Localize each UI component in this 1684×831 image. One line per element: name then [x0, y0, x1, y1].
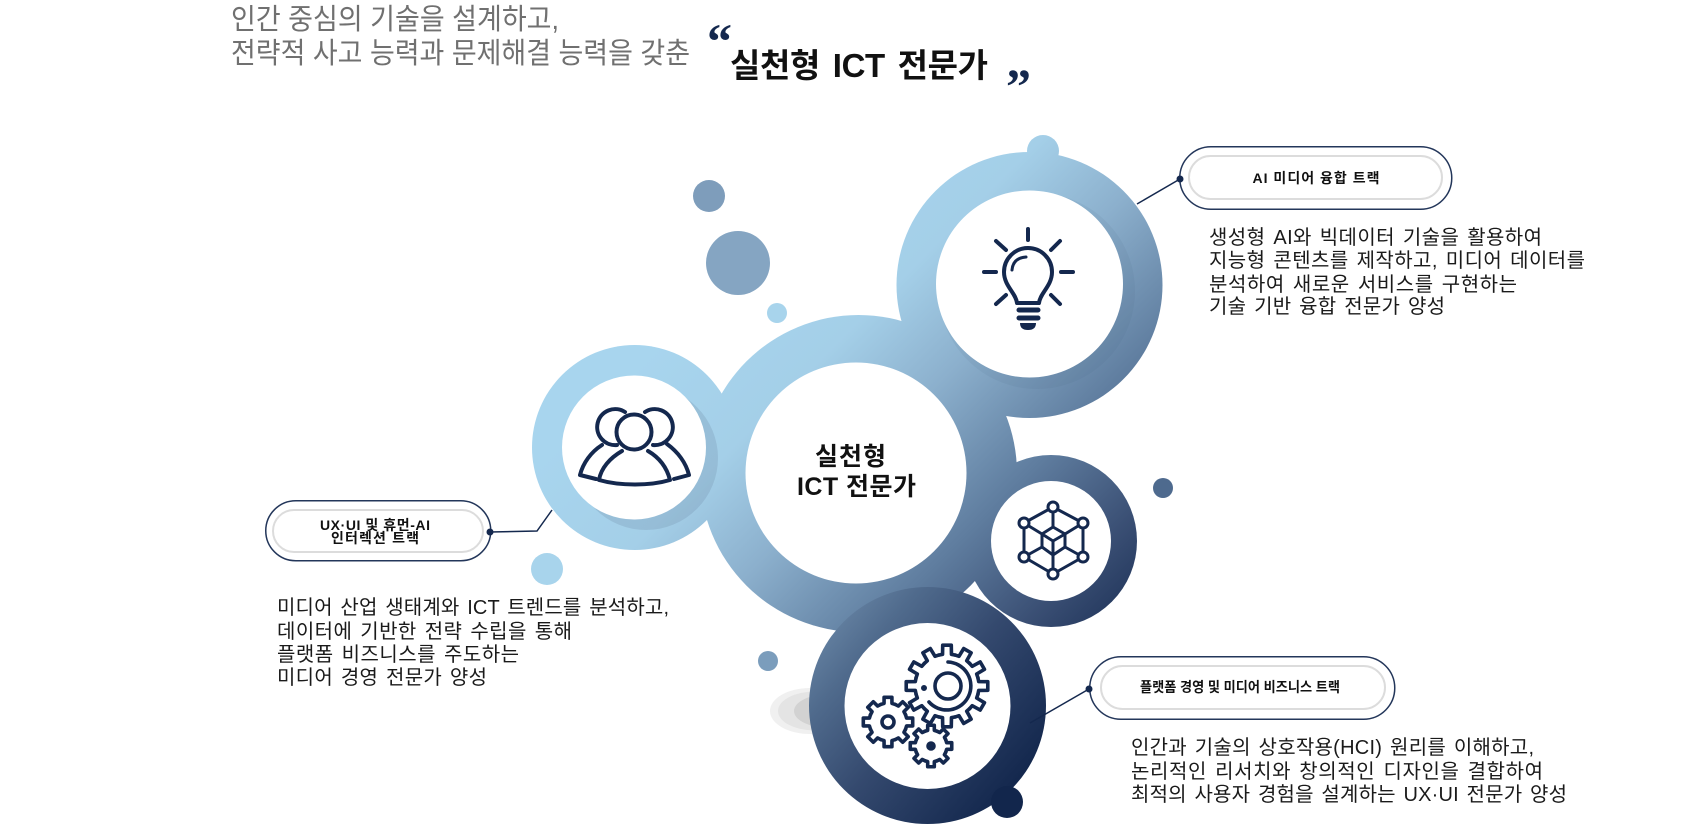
pill: platform track: [1086, 657, 1395, 719]
text: AI media description: 분석하여 새로운 서비스를 구현하는: [1209, 273, 1517, 296]
text: platform description: 인간과 기술의 상호작용(HCI) 원리를 이해하고,: [1131, 736, 1534, 759]
title: intro text: 인간 중심의 기술을 설계하고,: [231, 3, 559, 36]
panel: cube circle: [991, 481, 1111, 601]
text: AI media description: [1209, 226, 1585, 318]
text: platform description: 논리적인 리서치와 창의적인 디자인을 결합하여: [1131, 760, 1543, 783]
panel: UX track circle: [562, 376, 706, 520]
diagram: gradient rings: [532, 135, 1162, 824]
title: intro text: 전략적 사고 능력과 문제해결 능력을 갖춘: [231, 38, 690, 70]
text: AI media description: 생성형 AI와 빅데이터 기술을 활용하여: [1209, 226, 1542, 249]
panel: track AI circle: [936, 190, 1123, 378]
decorative floating dots: [531, 180, 1173, 671]
text: platform description: [1131, 736, 1567, 806]
icon: opening quote: “: [707, 13, 732, 69]
icon: gears: [863, 645, 988, 767]
pill: AI media track: [1176, 147, 1452, 209]
text: platform description: 최적의 사용자 경험을 설계하는 UX·UI 전문가 양성: [1131, 783, 1567, 806]
icon: people: [580, 409, 689, 484]
icon: light bulb: [984, 229, 1073, 330]
panel: center circle: [746, 362, 966, 584]
text: AI media description: 지능형 콘텐츠를 제작하고, 미디어 데이터를: [1209, 249, 1585, 272]
text: UX-UI description: 미디어 경영 전문가 양성: [277, 666, 487, 689]
center label: [797, 443, 916, 501]
center label: 실천형: [815, 443, 886, 471]
panel: platform track circle: [844, 623, 1010, 789]
connector: UX track: [490, 510, 552, 532]
title: main heading: 실천형 ICT 전문가: [730, 47, 988, 84]
pill: AI media track: AI 미디어 융합 트랙: [1252, 170, 1380, 186]
text: UX-UI description: 데이터에 기반한 전략 수립을 통해: [277, 620, 572, 643]
pill: UX-UI track: [266, 501, 494, 561]
text: UX-UI description: 플랫폼 비즈니스를 주도하는: [277, 643, 519, 666]
icon: closing quote: ”: [1006, 58, 1031, 114]
connector: platform track: [1030, 689, 1089, 723]
text: UX-UI description: 미디어 산업 생태계와 ICT 트렌드를 분석하고,: [277, 596, 669, 619]
center label: ICT 전문가: [797, 473, 916, 501]
pill: UX-UI track: 인터렉션 트랙: [331, 530, 419, 546]
icon: network cube: [1019, 502, 1088, 579]
pill: UX-UI track: UX·UI 및 휴먼-AI: [320, 517, 430, 533]
pill: platform track: 플랫폼 경영 및 미디어 비즈니스 트랙: [1140, 679, 1340, 695]
text: UX-UI description: [277, 596, 669, 689]
ground shadow: [770, 688, 866, 734]
connector: AI track: [1137, 179, 1180, 204]
text: AI media description: 기술 기반 융합 전문가 양성: [1209, 295, 1445, 318]
title: intro text: [231, 3, 690, 70]
